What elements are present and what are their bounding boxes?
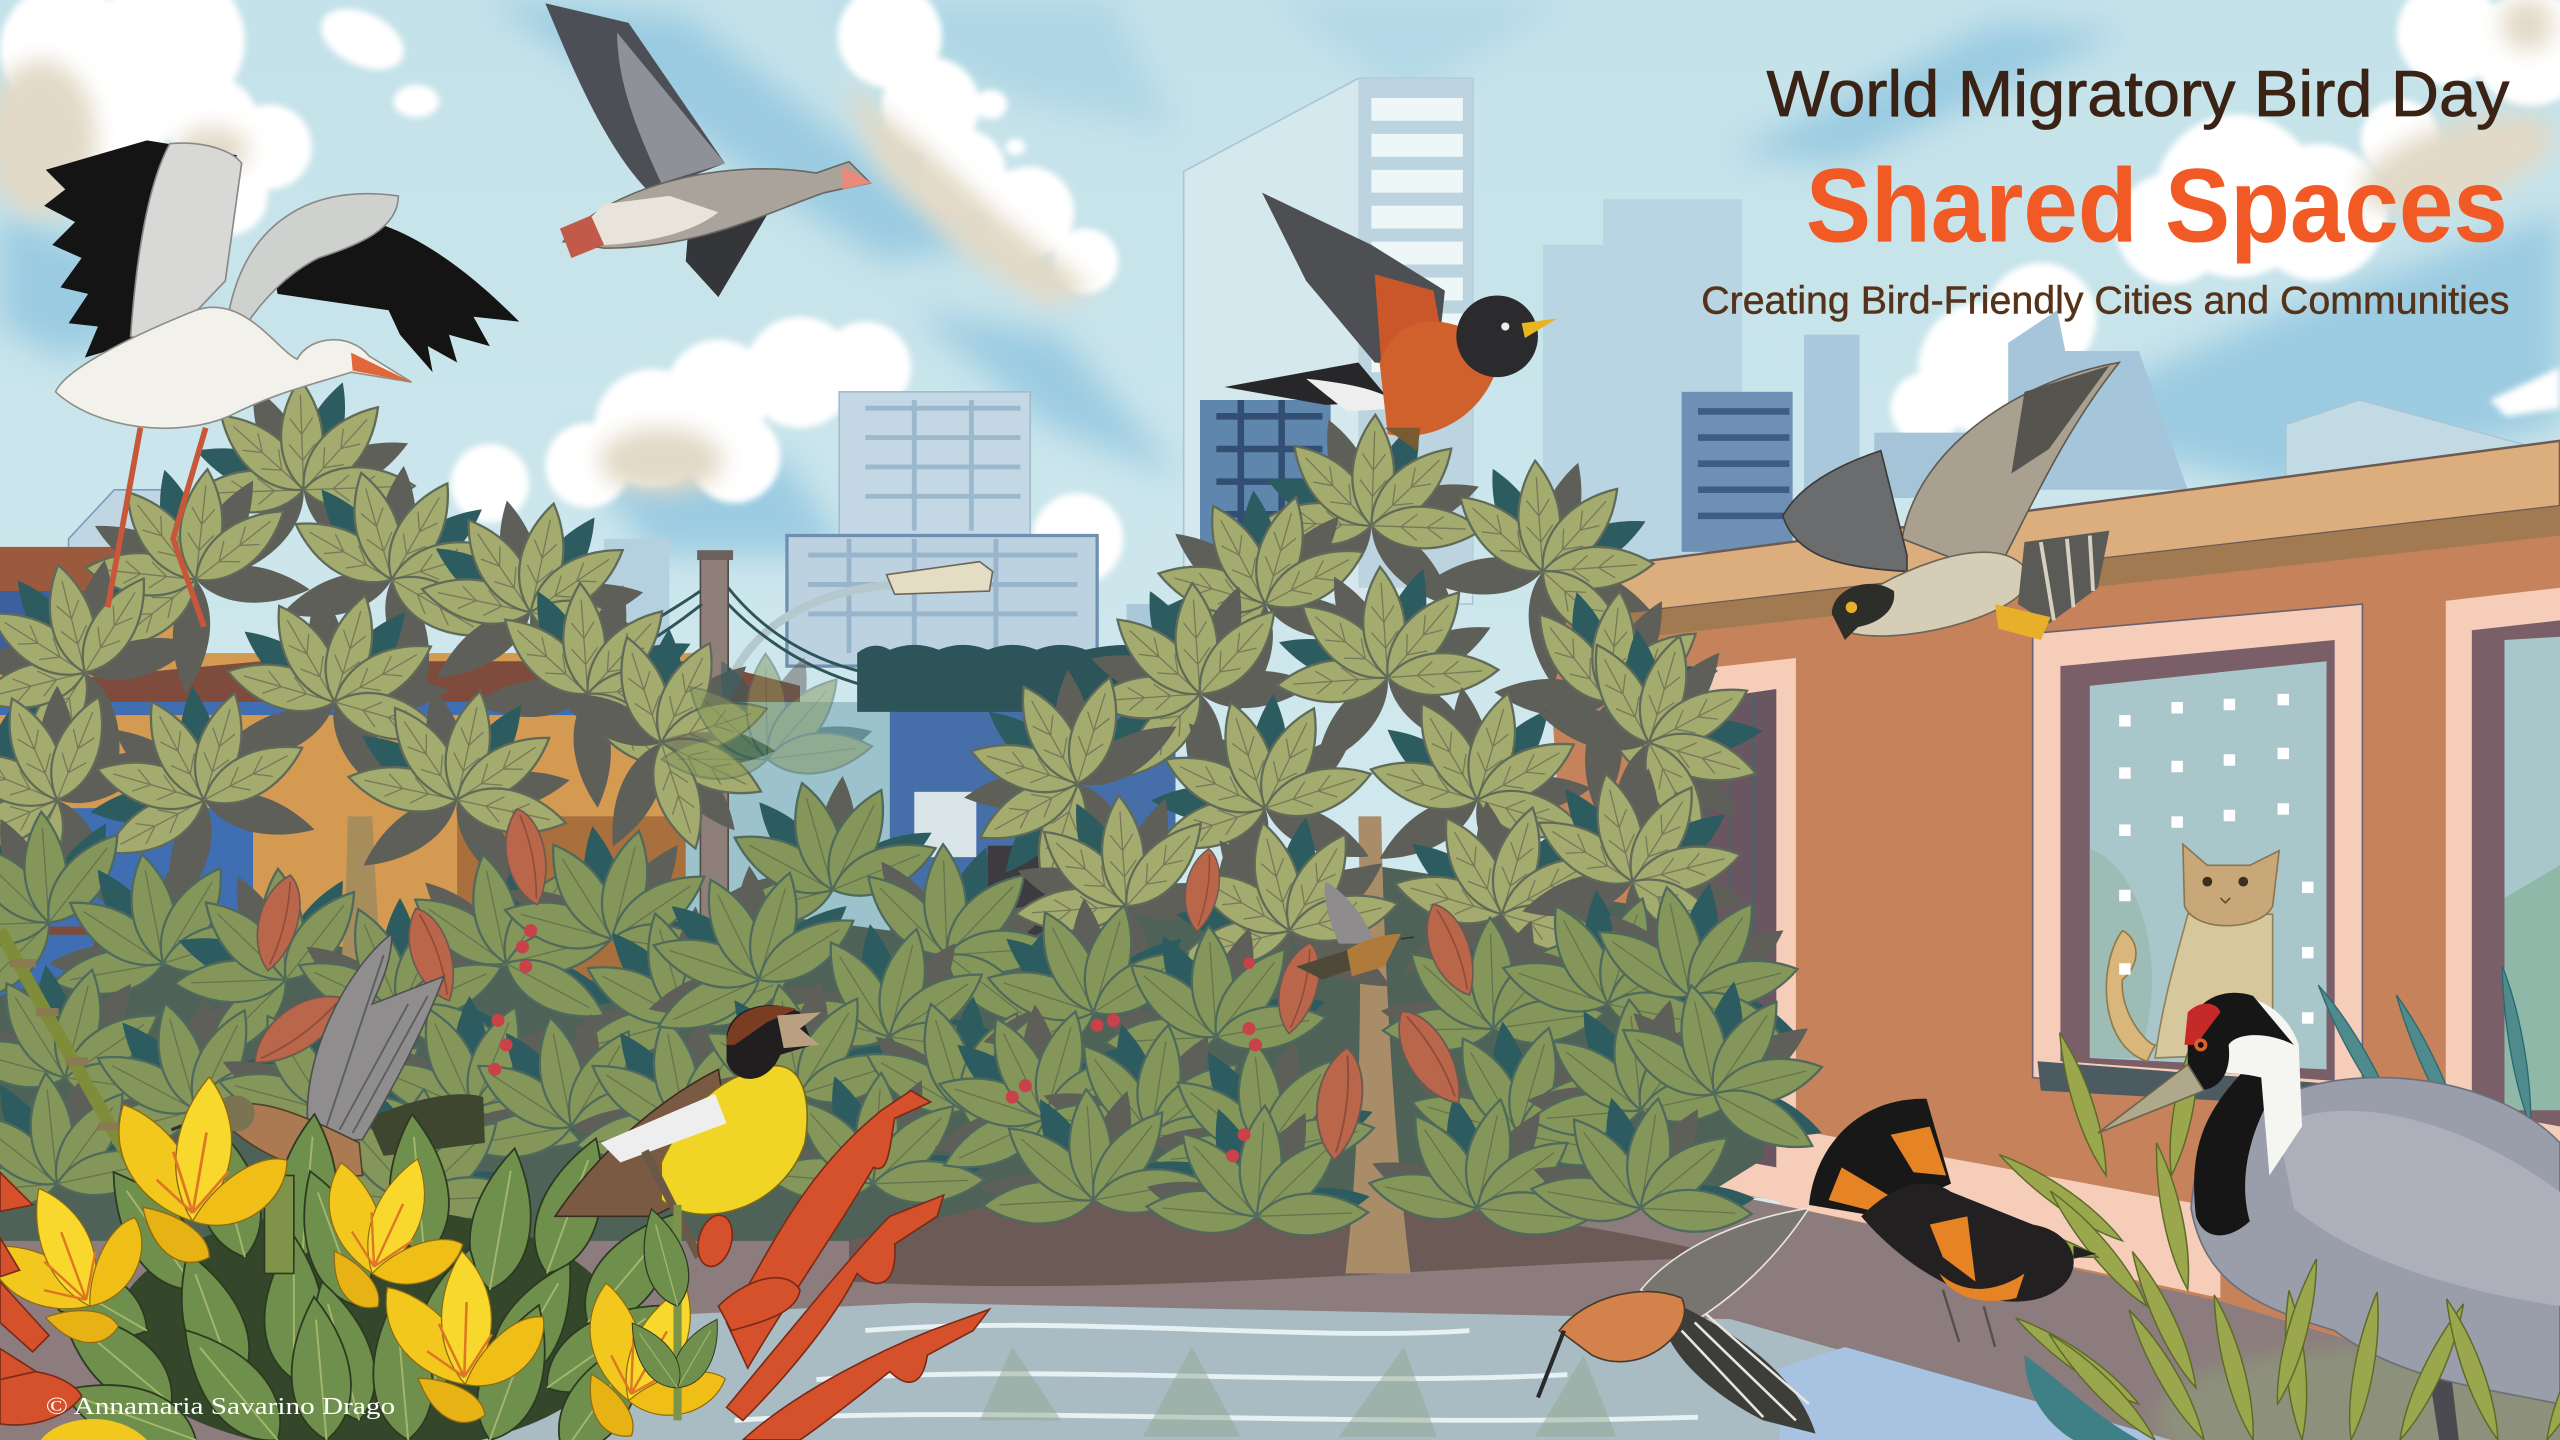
cat: [2106, 844, 2279, 1061]
bird: white stork: [44, 140, 519, 627]
central shed: [686, 645, 1176, 1192]
pond water: [294, 1303, 2171, 1440]
title block: [1701, 57, 2510, 322]
berries: [488, 867, 929, 1076]
overline title: World Migratory Bird Day: [1767, 57, 2510, 130]
foreground stem: [619, 1204, 731, 1420]
bird: american redstart: [1809, 1099, 2096, 1347]
cocoa pods: [1179, 846, 1485, 1163]
green foliage clump: [8, 1111, 703, 1440]
street lamp and wires: [612, 550, 993, 939]
cocoa pods: [241, 806, 553, 1077]
bird: peregrine falcon: [1783, 362, 2119, 640]
foliage backing: [0, 865, 1763, 1241]
left bamboo stem: [0, 931, 139, 1176]
subtitle: Creating Bird-Friendly Cities and Communities: [1701, 279, 2509, 322]
bird: small hummingbird on trunk: [1296, 882, 1414, 980]
second window: [2446, 588, 2560, 1143]
bird: yellow-breasted bunting: [555, 1005, 821, 1257]
bird: common crane: [2098, 993, 2560, 1440]
window with cat: [2033, 604, 2362, 1113]
bird: american robin: [1224, 193, 1558, 451]
wall base: [1776, 1123, 2220, 1298]
front reeds: [2042, 1257, 2560, 1440]
cocoa tree: small middle: [603, 642, 1116, 1204]
left houses: [0, 547, 800, 1200]
terracotta house with windows: [1543, 441, 2560, 1440]
yellow lilies: [0, 1077, 750, 1440]
door: [1665, 658, 1796, 1205]
city skyline: [69, 78, 2522, 669]
red tubular flowers: [0, 1091, 989, 1440]
bird: red knot: [1538, 1208, 1816, 1433]
berries: [1006, 958, 1262, 1162]
ground: [0, 1045, 2560, 1440]
main title: Shared Spaces: [1806, 148, 2508, 265]
artist credit: © Annamaria Savarino Drago: [46, 1393, 395, 1420]
cocoa tree: left: [0, 369, 929, 1224]
clouds: [0, 0, 2560, 584]
bird: rufous hummingbird: [171, 934, 485, 1176]
cocoa tree: central: [888, 413, 1871, 1273]
back reeds: [1950, 964, 2560, 1440]
bird: greylag goose: [545, 3, 872, 297]
